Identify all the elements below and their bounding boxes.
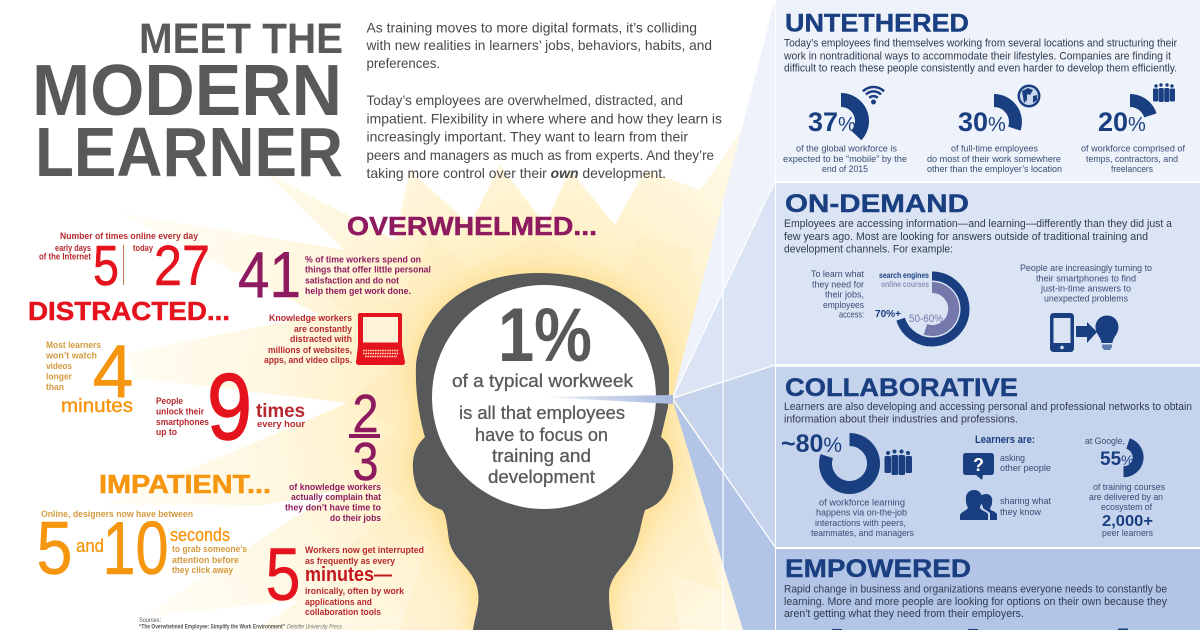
stat: knowledge workers distracted xyxy=(264,313,353,366)
learners are: Learners are: xyxy=(975,434,1035,446)
label: how employees learn: their jobs, xyxy=(825,289,864,300)
blue fan from head to panels xyxy=(673,0,775,630)
stat: interrupted every 5 minutes: Workers now get interrupted xyxy=(305,545,424,556)
stat: two thirds: actually complain that xyxy=(291,492,382,503)
stat: knowledge workers distracted: millions of websites, xyxy=(268,345,352,356)
text: smartphones: People are increasingly turning to xyxy=(1020,262,1152,273)
callout text xyxy=(452,370,634,487)
title: MEET THE xyxy=(139,15,343,63)
stat: times online every day xyxy=(39,231,210,298)
description: difficult to reach these people consistently and even harder to develop them efficiently. xyxy=(784,63,1177,75)
intro text xyxy=(366,20,722,181)
stat: 9 times every hour: unlock their xyxy=(156,406,204,417)
intro text: Today’s employees are overwhelmed, distracted, and xyxy=(366,92,683,108)
stat: 9 times every hour: 9 xyxy=(207,354,252,459)
icon: phone arrow bulb xyxy=(1050,313,1118,352)
callout text: training and xyxy=(492,445,591,466)
stat: 5 and 10 seconds: seconds xyxy=(170,525,230,545)
panel: on-demand xyxy=(776,183,1200,364)
stat: 41 percent: things that offer little personal xyxy=(305,265,431,276)
stat: google 55 percent: peer learners xyxy=(1102,527,1153,538)
stat: interrupted every 5 minutes: collaboration tools xyxy=(305,607,381,618)
stat: 30 percent remote: do most of their work somewhere xyxy=(927,153,1061,164)
stat: two thirds: of knowledge workers xyxy=(289,482,381,493)
description: information about their industries and professions. xyxy=(784,413,1018,425)
label: how employees learn: employees xyxy=(823,299,864,310)
stat: google 55 percent: of training courses xyxy=(1093,481,1165,492)
stat: 4 minutes: 4 xyxy=(92,329,134,413)
sources: Sources: xyxy=(139,617,161,624)
stat: 80 percent on the job: interactions with peers, xyxy=(815,517,906,528)
heading: overwhelmed: OVERWHELMED... xyxy=(347,211,597,241)
stat: 20 percent contractors: temps, contractors, and xyxy=(1086,153,1178,164)
stat: 4 minutes: longer xyxy=(46,372,72,383)
label: how employees learn xyxy=(811,268,864,320)
stat: google 55 percent: at Google, xyxy=(1085,435,1125,446)
text: smartphones: unexpected problems xyxy=(1044,293,1128,304)
stat: 20 percent contractors: 20% xyxy=(1098,107,1146,137)
stat: 20 percent contractors: freelancers xyxy=(1111,163,1153,174)
stat: knowledge workers distracted: are constantly xyxy=(294,324,353,335)
stat: 30 percent remote: 30% xyxy=(958,107,1006,137)
stat: 5 and 10 seconds: they click away xyxy=(172,565,234,576)
stat: times online every day: 5 xyxy=(93,234,119,298)
heading: EMPOWERED xyxy=(785,555,971,583)
text: asking other people xyxy=(1000,452,1051,473)
panel: untethered xyxy=(776,0,1200,181)
stat: 5 and 10 seconds: and xyxy=(76,536,104,556)
stat: times online every day: early days xyxy=(55,243,91,254)
description: learning. More and more people are looking for options on their own because they xyxy=(784,596,1167,608)
title: MODERN xyxy=(32,51,342,131)
stat: 4 minutes: minutes xyxy=(61,396,133,417)
intro text: As training moves to more digital formats, it’s colliding xyxy=(366,20,697,36)
description: Employees are accessing information—and learning—differently than they did just a xyxy=(784,218,1173,230)
title: LEARNER xyxy=(35,113,343,191)
blue wedge pointer xyxy=(543,395,673,404)
cropped chart tops xyxy=(832,628,1128,630)
intro text: taking more control over their own development. xyxy=(366,165,666,181)
heading: distracted: DISTRACTED... xyxy=(28,296,230,326)
stat: 9 times every hour xyxy=(156,354,305,459)
stat: 37 percent mobile: of the global workforce is xyxy=(796,143,897,154)
intro text: with new realities in learners’ jobs, behaviors, habits, and xyxy=(366,37,712,53)
text: sharing what they know: sharing what xyxy=(1000,495,1051,506)
label: how employees learn: they need for xyxy=(812,279,864,290)
stat: 80 percent on the job: ~80% xyxy=(781,430,842,458)
stat: 80 percent on the job: happens via on-the-job xyxy=(816,507,907,518)
stat: 37 percent mobile: expected to be “mobile” by the xyxy=(783,153,907,164)
stat: 5 and 10 seconds xyxy=(36,506,247,590)
description: work in nontraditional ways to accommodate their lifestyles. Companies are finding it xyxy=(783,50,1171,62)
stat: interrupted every 5 minutes: minutes— xyxy=(305,564,392,586)
stat: interrupted every 5 minutes: ironically, often by work xyxy=(305,586,405,597)
stat: two thirds: they don’t have time to xyxy=(285,503,381,514)
stat: knowledge workers distracted: apps, and video clips. xyxy=(264,355,352,366)
stat: 4 minutes: than xyxy=(46,382,64,393)
stat: 41 percent: satisfaction and do not xyxy=(305,276,400,287)
heading: COLLABORATIVE xyxy=(785,374,1018,402)
chart: search engines and online courses donut: online courses xyxy=(881,280,929,289)
stat: times online every day: Number of times online every day xyxy=(60,231,199,242)
text: smartphones: their smartphones to find xyxy=(1036,273,1136,284)
stat: 5 and 10 seconds: Online, designers now have between xyxy=(41,509,193,520)
stat: two thirds xyxy=(285,384,382,524)
stat: google 55 percent: ecosystem of xyxy=(1101,501,1152,512)
chart: search engines and online courses donut: 70%+ xyxy=(875,309,901,320)
stat: two thirds: 2 xyxy=(352,384,378,444)
text: sharing what they know: they know xyxy=(1000,506,1041,517)
stat: google 55 percent xyxy=(1085,435,1165,538)
stat: 80 percent on the job: of workforce learning xyxy=(819,497,905,508)
sources xyxy=(139,617,342,630)
stat: two thirds: 3 xyxy=(352,432,378,492)
stat: 5 and 10 seconds: 5 xyxy=(36,506,72,590)
text: asking other people: asking xyxy=(1000,452,1025,463)
heading: impatient: IMPATIENT... xyxy=(99,469,271,499)
icon: globe xyxy=(1018,84,1040,108)
panel: collaborative xyxy=(776,367,1200,547)
stat: times online every day: of the Internet xyxy=(39,252,92,263)
intro text: preferences. xyxy=(366,55,440,71)
stat: times online every day: today xyxy=(133,243,154,254)
stat: 9 times every hour: smartphones xyxy=(156,417,209,428)
stat: 9 times every hour: up to xyxy=(156,427,177,438)
stat: 4 minutes xyxy=(45,329,134,417)
text: sharing what they know xyxy=(1000,495,1051,517)
icon: people group xyxy=(1153,83,1175,102)
label: how employees learn: To learn what xyxy=(811,268,864,279)
stat: knowledge workers distracted: distracted with xyxy=(290,334,352,345)
stat: 5 and 10 seconds: 10 xyxy=(102,506,168,590)
icon: laptop xyxy=(356,313,405,365)
stat: 9 times every hour: every hour xyxy=(257,419,305,430)
description xyxy=(784,584,1167,620)
stat: 41 percent: % of time workers spend on xyxy=(305,254,421,265)
description: aren't getting what they need from their employers. xyxy=(784,608,1024,620)
icon: question bubble xyxy=(963,453,994,480)
label: how employees learn: access: xyxy=(839,309,864,320)
icon: question bubble: ? xyxy=(973,455,984,475)
stat: 4 minutes: videos xyxy=(46,361,72,372)
intro text: impatient. Flexibility in where where and how they learn is xyxy=(366,110,722,126)
callout text: is all that employees xyxy=(459,402,625,423)
stat: 4 minutes: won’t watch xyxy=(45,351,97,362)
icon: people group xyxy=(884,450,912,475)
description: Rapid change in business and organizations means everyone needs to constantly be xyxy=(784,584,1167,596)
stat: two thirds: do their jobs xyxy=(330,513,381,524)
intro text: increasingly important. They want to learn from their xyxy=(366,128,688,144)
stat: 4 minutes: Most learners xyxy=(46,340,101,351)
description xyxy=(784,218,1173,256)
stat: 5 and 10 seconds: to grab someone’s xyxy=(172,544,247,555)
stat: 41 percent: help them get work done. xyxy=(305,286,411,297)
stat: 37 percent mobile: end of 2015 xyxy=(822,163,868,174)
stat: google 55 percent: are delivered by an xyxy=(1089,491,1163,502)
stat: times online every day: 27 xyxy=(154,234,210,298)
stat: interrupted every 5 minutes: applications and xyxy=(305,597,372,608)
stat: 37 percent mobile: 37% xyxy=(808,107,856,137)
stat: google 55 percent: 2,000+ xyxy=(1102,513,1153,530)
stat: 80 percent on the job xyxy=(781,430,914,538)
stat: interrupted every 5 minutes xyxy=(266,533,424,618)
head silhouette with 1% callout xyxy=(413,273,673,630)
callout text: have to focus on xyxy=(475,424,608,445)
stat: interrupted every 5 minutes: 5 xyxy=(266,533,300,616)
stat: 20 percent contractors: of workforce comprised of xyxy=(1081,143,1185,154)
panel: empowered xyxy=(776,549,1200,630)
stat: 30 percent remote: of full-time employees xyxy=(951,143,1038,154)
icon: two people xyxy=(960,490,997,520)
description xyxy=(783,38,1177,75)
1 percent figure: 1% xyxy=(498,293,592,378)
stat: 20 percent contractors xyxy=(1081,100,1185,174)
chart: search engines and online courses donut xyxy=(875,271,965,342)
stat: 41 percent: 41 xyxy=(238,238,301,311)
stat: google 55 percent: 55% xyxy=(1100,449,1134,470)
heading: UNTETHERED xyxy=(785,10,969,38)
stat: 30 percent remote xyxy=(927,100,1062,174)
heading: ON-DEMAND xyxy=(785,190,969,218)
description: development channels. For example: xyxy=(784,244,953,256)
stat: 5 and 10 seconds: attention before xyxy=(172,555,239,566)
stat: interrupted every 5 minutes: as frequently as every xyxy=(305,556,396,567)
text: asking other people: other people xyxy=(1000,462,1051,473)
chart: search engines and online courses donut: 50-60% xyxy=(909,313,943,325)
description: Today’s employees find themselves working from several locations and structuring their xyxy=(784,38,1177,50)
text: smartphones xyxy=(1020,262,1152,304)
description xyxy=(784,401,1192,425)
callout text: development xyxy=(488,466,595,487)
stat: knowledge workers distracted: Knowledge workers xyxy=(269,313,352,324)
text: smartphones: just-in-time answers to xyxy=(1040,283,1131,294)
chart: search engines and online courses donut: search engines xyxy=(879,271,929,280)
stat: 37 percent mobile xyxy=(783,100,907,174)
callout text: of a typical workweek xyxy=(452,370,634,391)
stat: 9 times every hour: times xyxy=(256,401,305,422)
title xyxy=(32,15,343,191)
stat: 9 times every hour: People xyxy=(156,396,183,407)
stat: 30 percent remote: other than the employer’s location xyxy=(927,163,1062,174)
stat: 80 percent on the job: teammates, and managers xyxy=(811,527,914,538)
stat: 41 percent xyxy=(238,238,431,311)
intro text: peers and managers as much as from experts. And they’re xyxy=(366,147,714,163)
icon: wifi xyxy=(863,87,884,104)
white circle xyxy=(432,285,656,509)
description: few years ago. Most are looking for answers outside of traditional training and xyxy=(784,231,1148,243)
